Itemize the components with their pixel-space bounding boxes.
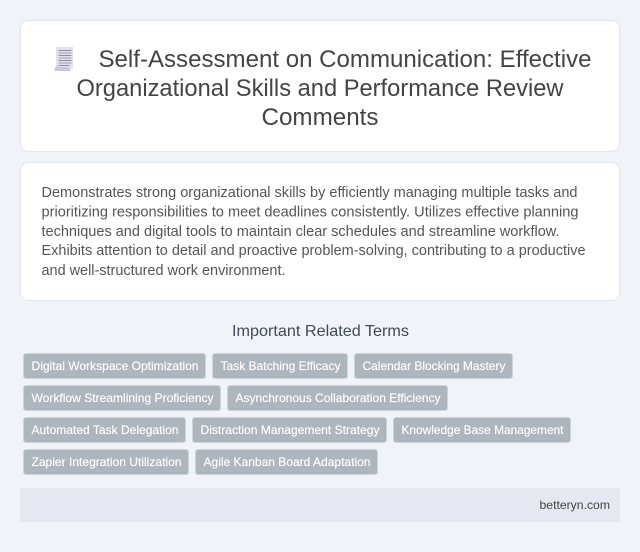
title: Organizational Skills and Performance Review xyxy=(76,75,564,102)
tag: Workflow Streamlining Proficiency: Workflow Streamlining Proficiency xyxy=(32,391,214,405)
footer credit: betteryn.com xyxy=(540,498,610,512)
tag: Distraction Management Strategy xyxy=(192,418,386,442)
heading: related terms: Important Related Terms xyxy=(232,323,409,340)
tag: Workflow Streamlining Proficiency xyxy=(24,386,220,410)
title: Comments xyxy=(262,104,378,131)
tag: Digital Workspace Optimization: Digital Workspace Optimization xyxy=(32,359,199,373)
tag: Knowledge Base Management xyxy=(394,418,570,442)
tag: Automated Task Delegation xyxy=(24,418,186,442)
tag: Zapier Integration Utilization: Zapier Integration Utilization xyxy=(32,455,182,469)
tag: Task Batching Efficacy: Task Batching Efficacy xyxy=(220,359,340,373)
tag: Task Batching Efficacy xyxy=(212,354,348,378)
panel: title card xyxy=(20,20,620,152)
tag: Asynchronous Collaboration Efficiency xyxy=(228,386,448,410)
tag: Calendar Blocking Mastery xyxy=(354,354,512,378)
title: Self-Assessment on Communication: Effective xyxy=(98,46,592,73)
text block: description: Exhibits attention to detail and proactive problem-solving, contributing to a productive xyxy=(42,243,586,259)
tag: Calendar Blocking Mastery: Calendar Blocking Mastery xyxy=(362,359,506,373)
footer xyxy=(20,488,620,522)
tag: Distraction Management Strategy: Distraction Management Strategy xyxy=(200,423,380,437)
tag: Zapier Integration Utilization xyxy=(24,450,188,474)
tag: Asynchronous Collaboration Efficiency: Asynchronous Collaboration Efficiency xyxy=(236,391,440,405)
text block: description xyxy=(42,185,586,279)
tag: Digital Workspace Optimization xyxy=(24,354,206,378)
tag: Agile Kanban Board Adaptation: Agile Kanban Board Adaptation xyxy=(204,455,370,469)
icon: document xyxy=(54,47,73,71)
title xyxy=(76,46,592,131)
panel: description xyxy=(20,162,620,300)
text block: description: techniques and digital tools to maintain clear schedules and streamline workflow. xyxy=(42,224,560,240)
text block: description: Demonstrates strong organizational skills by efficiently managing multiple tasks and xyxy=(42,185,578,201)
tag: Knowledge Base Management: Knowledge Base Management xyxy=(402,423,564,437)
text block: description: prioritizing responsibilities to meet deadlines consistently. Utilizes effective planning xyxy=(42,204,578,220)
tag: Agile Kanban Board Adaptation xyxy=(196,450,378,474)
text block: description: and well-structured work environment. xyxy=(42,263,286,279)
tag: Automated Task Delegation: Automated Task Delegation xyxy=(32,423,178,437)
